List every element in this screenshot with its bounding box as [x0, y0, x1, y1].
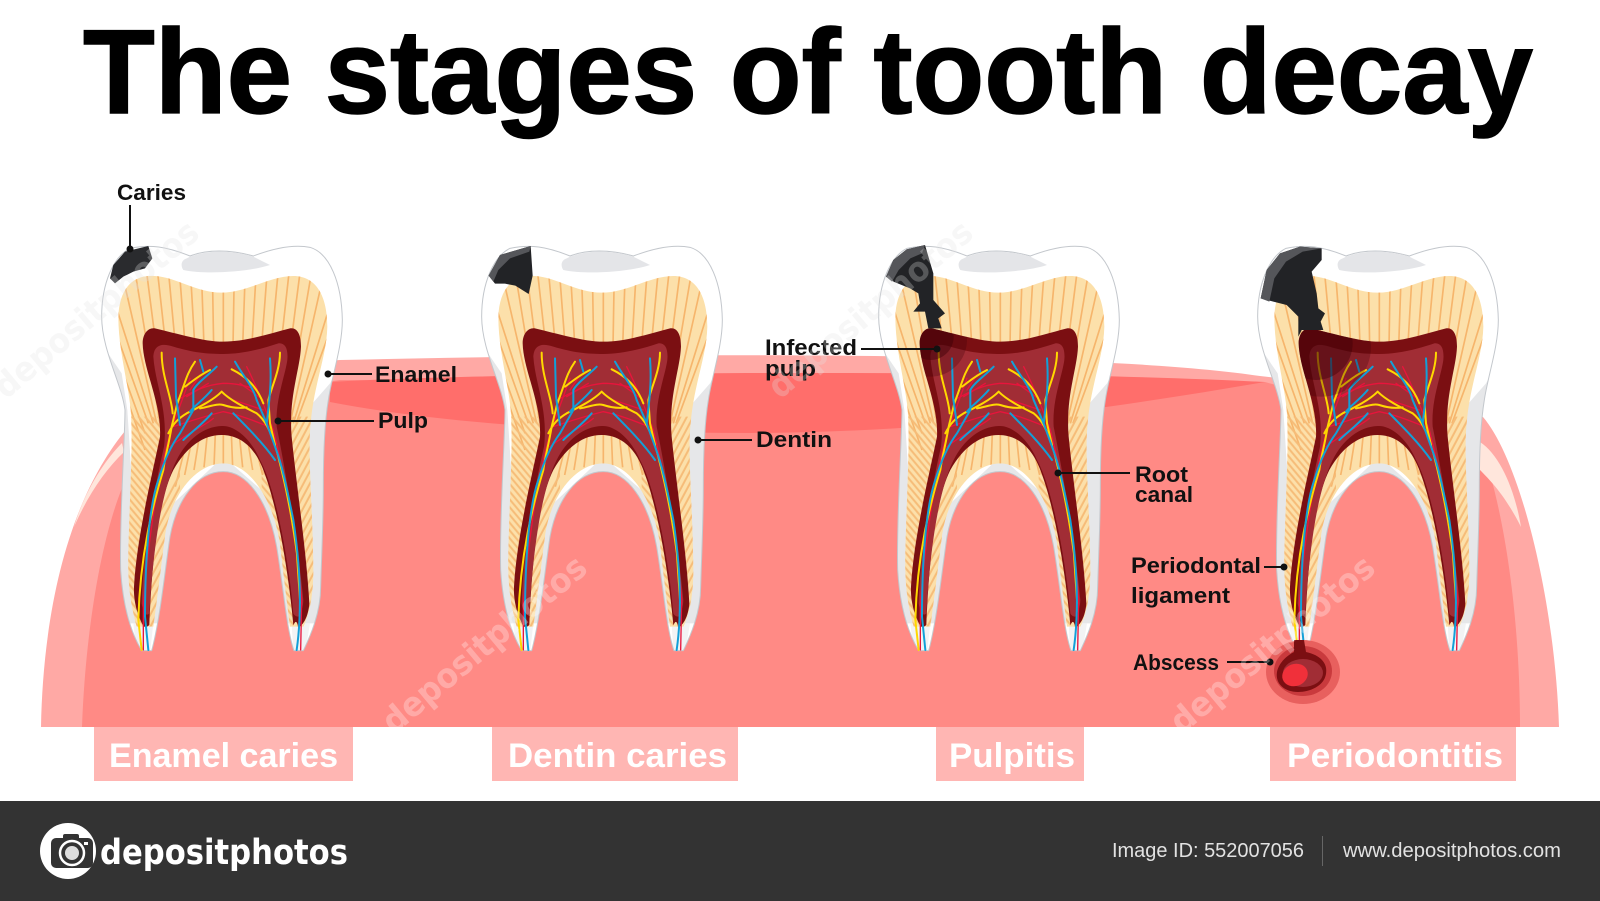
- abscess: [1266, 640, 1340, 704]
- label: caries: [117, 180, 186, 252]
- caries lesion 2: [489, 246, 533, 294]
- label: dentin: [694, 427, 832, 452]
- label: root canal: [1054, 462, 1193, 507]
- watermarks: depositphotos: [1162, 547, 1383, 742]
- tooth 4: periodontitis: [1253, 246, 1513, 653]
- watermarks: [0, 212, 1383, 742]
- caption: pulpitis: Pulpitis: [949, 737, 1075, 775]
- caption: dentin caries: [492, 727, 738, 781]
- watermarks: depositphotos: [374, 547, 595, 742]
- caries lesion 4: [1261, 247, 1325, 337]
- caries lesion 1: [110, 246, 152, 283]
- label: infected pulp: pulp: [765, 356, 816, 381]
- footer bar: [0, 801, 1600, 901]
- tooth 3: pulpitis: [874, 245, 1134, 653]
- caption: enamel caries: [94, 727, 353, 781]
- caption: dentin caries: Dentin caries: [508, 737, 727, 775]
- label: root canal: canal: [1135, 482, 1193, 507]
- infected pulp shading: [920, 328, 967, 376]
- infected pulp shading: [1298, 330, 1371, 396]
- title: The stages of tooth decay: [83, 5, 1533, 139]
- label: enamel: [324, 362, 457, 387]
- caption: periodontitis: Periodontitis: [1287, 737, 1503, 775]
- image id: Image ID: 552007056: [1112, 840, 1304, 862]
- tooth 1: enamel caries: [97, 246, 357, 653]
- label: infected pulp: [765, 335, 940, 381]
- caption: periodontitis: [1270, 727, 1516, 781]
- gum: [41, 355, 1559, 727]
- label: pulp: Pulp: [378, 408, 428, 433]
- label: abscess: Abscess: [1133, 650, 1219, 675]
- label: pulp: [274, 408, 428, 433]
- label: enamel: Enamel: [375, 362, 457, 387]
- caption: enamel caries: Enamel caries: [109, 737, 338, 775]
- label: periodontal ligament: Periodontal: [1131, 553, 1261, 578]
- icon: camera logo: [40, 823, 96, 879]
- caries lesion 3: [886, 245, 945, 328]
- logo wordmark: depositphotos: [100, 833, 348, 873]
- website: www.depositphotos.com: [1342, 840, 1561, 862]
- label: root canal: Root: [1135, 462, 1189, 487]
- label: periodontal ligament: [1131, 553, 1288, 608]
- caption: pulpitis: [936, 727, 1084, 781]
- watermarks: depositphotos: [760, 212, 981, 407]
- label: caries: Caries: [117, 180, 186, 205]
- label: infected pulp: Infected: [765, 335, 857, 360]
- label: abscess: [1133, 650, 1274, 675]
- tooth 2: dentin caries: [477, 246, 737, 653]
- label: periodontal ligament: ligament: [1131, 583, 1231, 608]
- label: dentin: Dentin: [756, 427, 832, 452]
